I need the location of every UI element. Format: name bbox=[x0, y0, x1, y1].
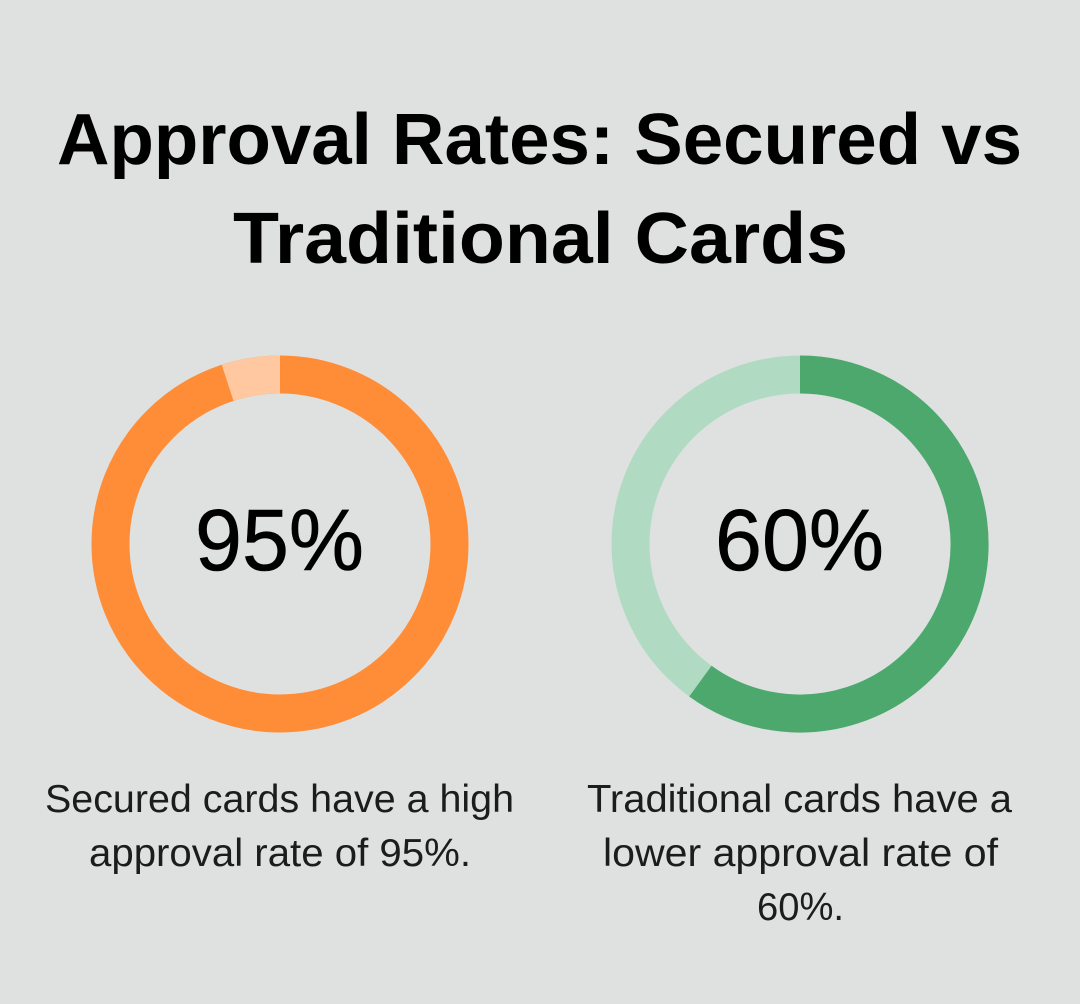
donut chart: 60% bbox=[630, 374, 970, 714]
value: 60%: 60% bbox=[715, 492, 884, 589]
title: Traditional Cards bbox=[233, 199, 848, 279]
caption: traditional cards: lower approval rate of bbox=[603, 832, 998, 875]
panel: traditional cards bbox=[587, 374, 1012, 929]
caption: secured cards bbox=[45, 778, 514, 875]
caption: traditional cards bbox=[587, 778, 1012, 929]
panel: secured cards bbox=[45, 374, 514, 875]
value: 95%: 95% bbox=[195, 492, 364, 589]
caption: traditional cards: 60%. bbox=[757, 886, 844, 929]
donut chart: 95% bbox=[110, 374, 450, 714]
caption: secured cards: approval rate of 95%. bbox=[89, 832, 471, 875]
caption: secured cards: Secured cards have a high bbox=[45, 778, 514, 821]
title: Approval Rates: Secured vs bbox=[57, 100, 1022, 180]
caption: traditional cards: Traditional cards have a bbox=[587, 778, 1012, 821]
title bbox=[57, 100, 1022, 279]
